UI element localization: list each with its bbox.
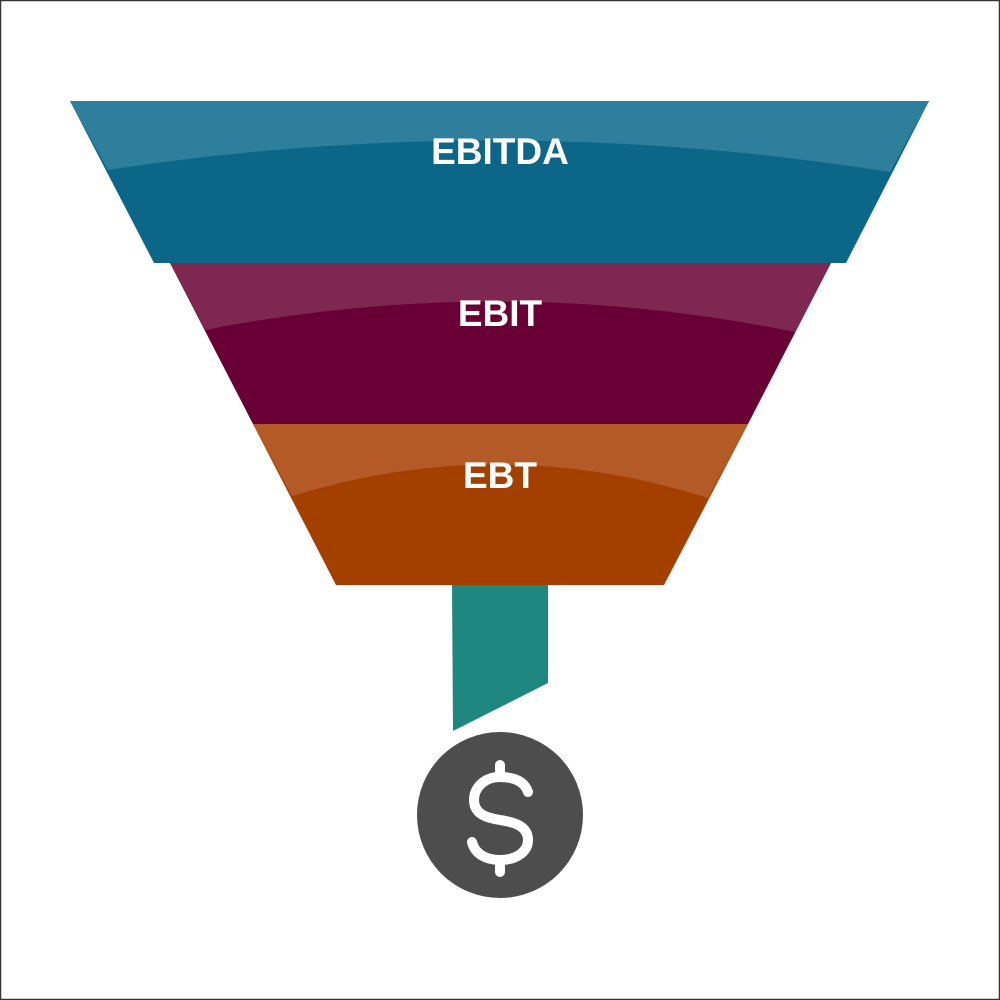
funnel band: EBITDA	[70, 101, 929, 263]
funnel band: EBT	[253, 424, 748, 585]
icon: dollar coin	[417, 732, 583, 898]
label: EBT: EBT	[463, 455, 537, 496]
funnel stem	[452, 585, 548, 731]
label: EBIT: EBIT	[458, 293, 543, 334]
label: EBITDA: EBITDA	[431, 131, 569, 172]
funnel band: EBIT	[170, 263, 831, 424]
